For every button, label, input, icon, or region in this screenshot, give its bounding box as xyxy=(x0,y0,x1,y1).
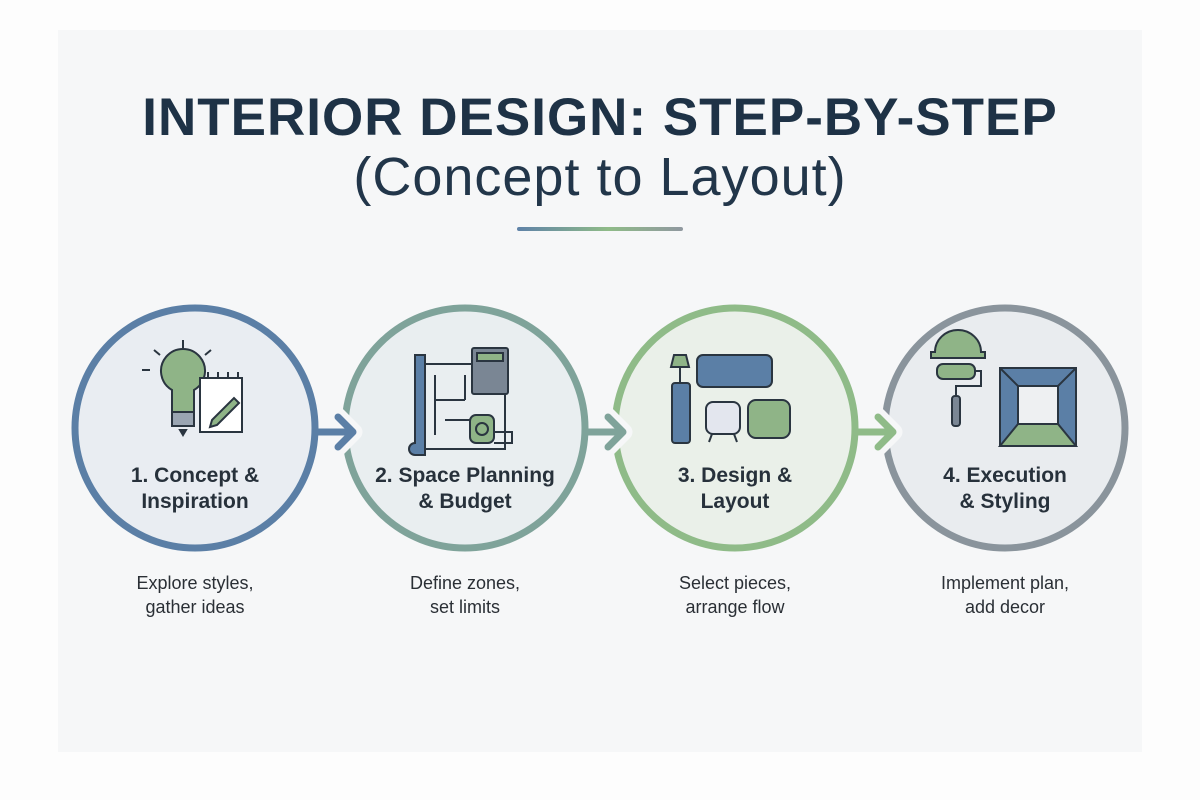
step 4 label: 4. Execution xyxy=(943,464,1067,487)
subtitle: (Concept to Layout) xyxy=(353,147,847,207)
icon: blueprint, calculator, tape xyxy=(409,348,512,455)
description 3 xyxy=(679,573,791,617)
step 3 circle: Layout xyxy=(701,490,769,513)
icon: furniture xyxy=(671,355,790,443)
description 4 xyxy=(941,573,1069,617)
description 1: Explore styles, xyxy=(136,573,254,593)
description 2: set limits xyxy=(430,597,500,617)
step 4 circle: & Styling xyxy=(959,490,1051,513)
arrow 2 to 3 xyxy=(585,416,624,448)
description 1: gather ideas xyxy=(145,597,245,617)
step 1 circle xyxy=(75,308,315,548)
description 3: arrange flow xyxy=(685,597,785,617)
step 2 label: 2. Space Planning xyxy=(375,464,555,487)
step 4 circle xyxy=(885,308,1125,548)
step 2 circle xyxy=(345,308,585,548)
description 3: Select pieces, xyxy=(679,573,791,593)
description 1 xyxy=(136,573,254,617)
step 1 label: 1. Concept & xyxy=(131,464,259,487)
description 4: Implement plan, xyxy=(941,573,1069,593)
description 2 xyxy=(410,573,520,617)
description 2: Define zones, xyxy=(410,573,520,593)
step 3 label: 3. Design & xyxy=(678,464,792,487)
title: INTERIOR DESIGN: STEP-BY-STEP xyxy=(142,88,1058,147)
arrow 1 to 2 xyxy=(315,416,354,448)
icon: lightbulb and notepad xyxy=(142,340,242,435)
step 1 circle: Inspiration xyxy=(141,490,249,513)
arrow 3 to 4 xyxy=(855,416,894,448)
step 2 circle: & Budget xyxy=(418,490,512,513)
step 3 circle xyxy=(615,308,855,548)
description 4: add decor xyxy=(965,597,1045,617)
icon: hard hat, roller, room xyxy=(931,330,1076,446)
